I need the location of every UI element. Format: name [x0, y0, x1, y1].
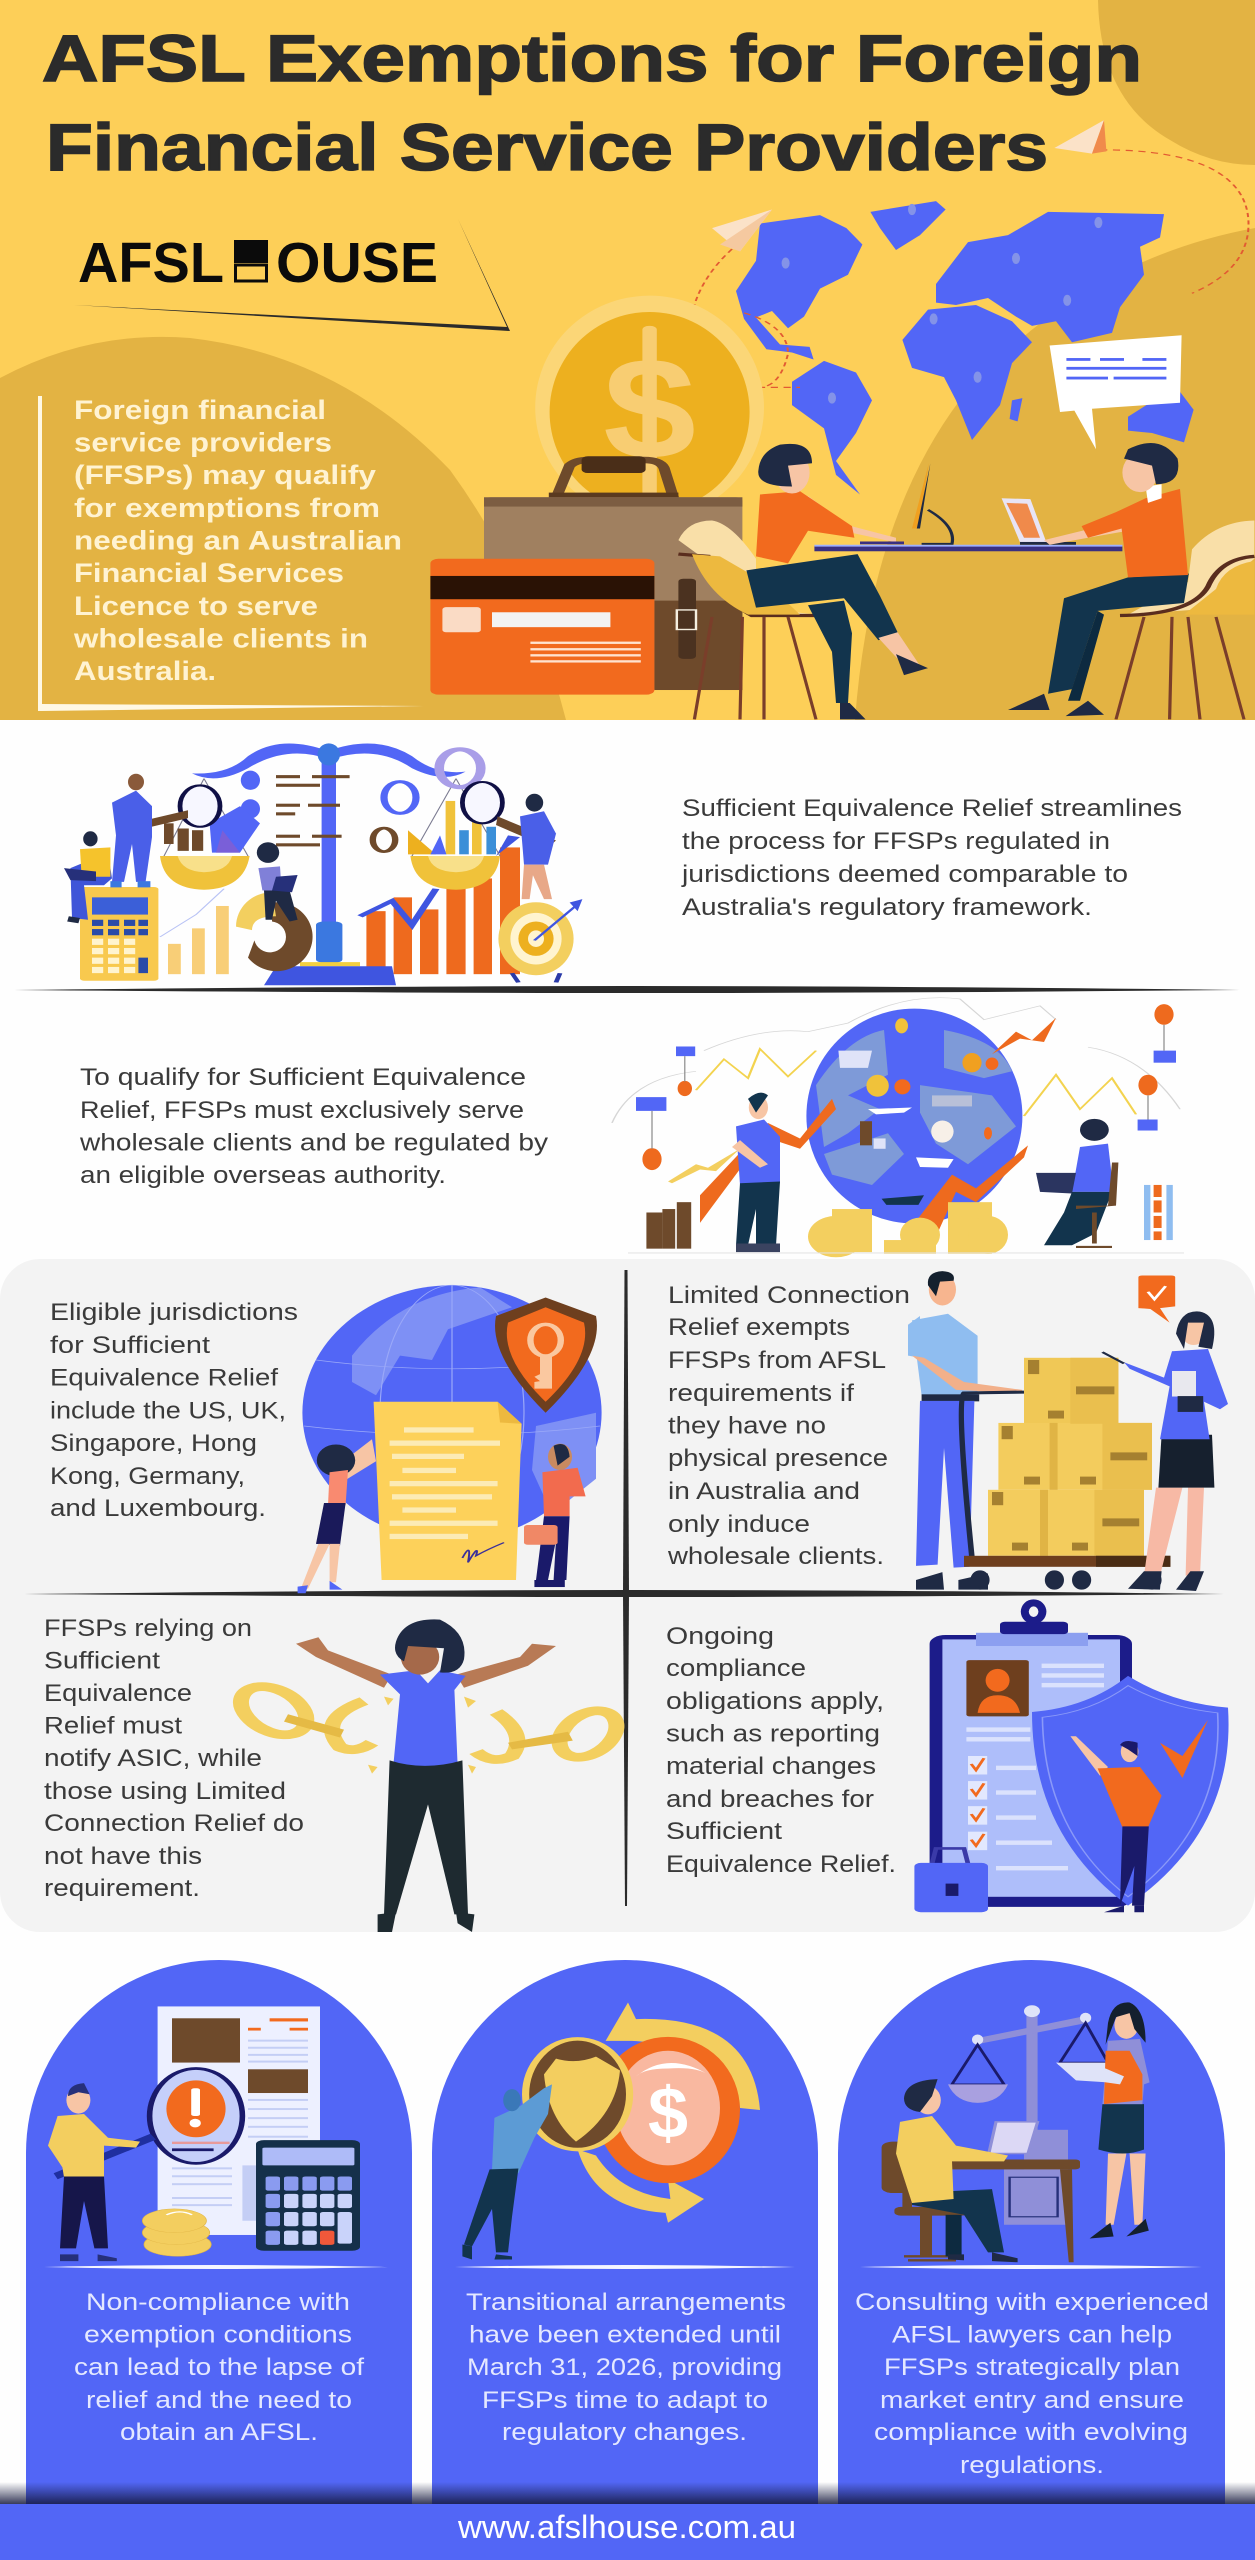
text: limited connection relief: they have no [668, 1412, 826, 1440]
text: limited connection relief: only induce [668, 1511, 810, 1538]
text: ongoing compliance [666, 1623, 896, 1878]
illustration: shield, coin and arrows: $ [648, 2074, 688, 2154]
illustration: woman on the right at desk [1008, 443, 1254, 719]
text: consulting lawyers: compliance with evolving [874, 2419, 1188, 2446]
intro text block: for exemptions from [74, 493, 380, 523]
panel: arch transitional arrangements [432, 1960, 818, 2504]
intro text block: Licence to serve [74, 591, 318, 621]
panel: arch consulting lawyers [838, 1960, 1225, 2504]
text: eligible jurisdictions [50, 1299, 298, 1522]
text: eligible jurisdictions: and Luxembourg. [50, 1495, 266, 1522]
text: notify ASIC: notify ASIC, while [44, 1745, 262, 1772]
intro text block: (FFSPs) may qualify [74, 460, 376, 490]
icon: gold dollar coin: $ [603, 329, 696, 490]
text: consulting lawyers: regulations. [960, 2452, 1104, 2479]
intro text block [38, 395, 424, 711]
panel: header banner [0, 0, 1255, 720]
text: limited connection relief: Limited Connection [668, 1282, 910, 1309]
section 2 text: an eligible overseas authority. [80, 1162, 446, 1189]
text: ongoing compliance: material changes [666, 1753, 876, 1780]
text: consulting lawyers: AFSL lawyers can help [892, 2322, 1172, 2348]
logo: AFSL House: AFSL [78, 231, 224, 295]
section 2 text: Relief, FFSPs must exclusively serve [80, 1097, 524, 1124]
text: notify ASIC: Connection Relief do [44, 1810, 304, 1837]
section 1 text: jurisdictions deemed comparable to [681, 861, 1128, 888]
section 2 text: To qualify for Sufficient Equivalence [80, 1064, 526, 1091]
text: transitional arrangements: FFSPs time to adapt to [482, 2387, 768, 2414]
illustration: globe, shield key and document [298, 1285, 602, 1593]
text: eligible jurisdictions: Kong, Germany, [50, 1463, 245, 1490]
illustration: global economy globe [612, 998, 1184, 1257]
text: notify ASIC [44, 1615, 304, 1902]
text: ongoing compliance: Ongoing [666, 1623, 774, 1650]
text: notify ASIC: those using Limited [44, 1778, 286, 1805]
text: non-compliance [74, 2289, 364, 2446]
section 2 text [79, 1064, 548, 1189]
illustration: scales with analysts and charts [64, 743, 582, 985]
text: consulting lawyers [855, 2289, 1209, 2479]
icon: gold dollar coin [535, 296, 764, 519]
text: notify ASIC: Equivalence [44, 1680, 192, 1707]
illustration: desk with monitor and laptop [814, 463, 1122, 551]
text: limited connection relief: Relief exempts [668, 1314, 850, 1341]
text: consulting lawyers: Consulting with experienced [855, 2289, 1209, 2316]
text: ongoing compliance: and breaches for [666, 1786, 874, 1813]
illustration: lawyers with scales [882, 2002, 1150, 2262]
text: ongoing compliance: such as reporting [666, 1720, 880, 1748]
logo: AFSL House: OUSE [276, 231, 438, 295]
icon: world map [736, 201, 1194, 494]
text: notify ASIC: requirement. [44, 1875, 200, 1902]
title: AFSL Exemptions for Foreign [42, 21, 1142, 95]
section 1 text: the process for FFSPs regulated in [682, 828, 1110, 855]
intro text block: wholesale clients in [73, 624, 368, 654]
illustration: woman on the left at desk [678, 444, 928, 719]
text: notify ASIC: Relief must [44, 1712, 182, 1740]
text: non-compliance: obtain an AFSL. [120, 2419, 318, 2446]
intro text block: Australia. [74, 656, 216, 686]
logo: AFSL House [74, 219, 510, 331]
icon: briefcase [484, 456, 742, 690]
illustration: delivery boxes with man and woman [908, 1271, 1228, 1591]
divider: arch 2 [455, 2265, 795, 2269]
text: eligible jurisdictions: Singapore, Hong [50, 1430, 257, 1457]
text: eligible jurisdictions: include the US, UK, [50, 1398, 286, 1424]
section 2 text: wholesale clients and be regulated by [79, 1130, 548, 1156]
text: eligible jurisdictions: Eligible jurisdictions [50, 1299, 298, 1326]
title: Financial Service Providers [46, 110, 1048, 184]
text: non-compliance: can lead to the lapse of [74, 2354, 364, 2381]
text: transitional arrangements: have been extended until [469, 2322, 781, 2348]
illustration: clipboard and shield [914, 1599, 1229, 1912]
text: ongoing compliance: obligations apply, [666, 1688, 884, 1715]
footer bar [0, 2504, 1255, 2560]
text: non-compliance: Non-compliance with [86, 2289, 350, 2316]
text: ongoing compliance: Sufficient [666, 1818, 782, 1845]
text: transitional arrangements: Transitional arrangements [466, 2289, 786, 2316]
icon: credit card [430, 559, 654, 695]
text: eligible jurisdictions: for Sufficient [50, 1332, 210, 1359]
illustration: magnifier, document and calculator [48, 2006, 360, 2261]
icon: speech bubble [1050, 335, 1182, 449]
text: ongoing compliance: Equivalence Relief. [666, 1851, 896, 1878]
text: notify ASIC: FFSPs relying on [44, 1615, 252, 1642]
intro text block: Financial Services [74, 558, 344, 588]
text: limited connection relief: requirements if [668, 1380, 854, 1407]
panel: grey four-quadrant panel [0, 1259, 1255, 1932]
divider: arch 1 [44, 2265, 388, 2269]
footer bar: www.afslhouse.com.au [457, 2509, 796, 2545]
text: transitional arrangements: regulatory changes. [502, 2419, 747, 2446]
intro text block: Foreign financial [74, 395, 326, 425]
text: notify ASIC: not have this [44, 1843, 202, 1870]
text: limited connection relief: physical presence [668, 1445, 888, 1472]
text: consulting lawyers: FFSPs strategically plan [884, 2354, 1180, 2381]
text: limited connection relief [667, 1282, 910, 1570]
text: transitional arrangements [466, 2289, 786, 2446]
text: limited connection relief: FFSPs from AFSL [668, 1347, 886, 1374]
divider: arch 3 [860, 2265, 1202, 2269]
illustration: woman breaking chains [228, 1619, 627, 1932]
text: limited connection relief: in Australia and [668, 1478, 860, 1505]
text: consulting lawyers: market entry and ensure [880, 2387, 1184, 2414]
text: transitional arrangements: March 31, 2026, providing [467, 2354, 782, 2381]
text: non-compliance: relief and the need to [86, 2387, 352, 2414]
text: non-compliance: exemption conditions [84, 2322, 352, 2348]
illustration: shield, coin and arrows [462, 2002, 760, 2259]
intro text block: needing an Australian [74, 526, 402, 556]
text: notify ASIC: Sufficient [44, 1648, 160, 1674]
intro text block: service providers [74, 428, 332, 458]
section 1 text [681, 795, 1182, 921]
panel: arch non-compliance [26, 1960, 412, 2504]
title [42, 21, 1142, 184]
divider [14, 986, 1240, 993]
section 1 text: Sufficient Equivalence Relief streamlines [682, 795, 1182, 822]
section 1 text: Australia's regulatory framework. [682, 894, 1092, 921]
text: eligible jurisdictions: Equivalence Relief [50, 1364, 278, 1392]
dashed flight paths and paper planes [694, 120, 1249, 387]
text: ongoing compliance: compliance [666, 1655, 806, 1682]
text: limited connection relief: wholesale clients. [667, 1543, 884, 1570]
